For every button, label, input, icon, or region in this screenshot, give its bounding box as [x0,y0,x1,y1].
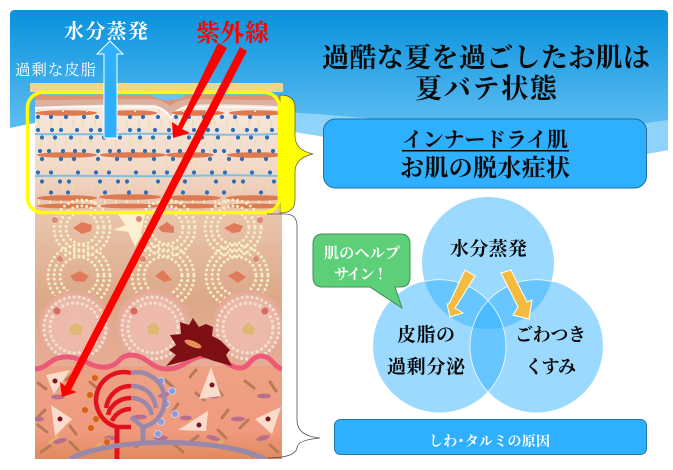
label: sebum: 皮脂の [397,324,455,346]
label: roughness and dullness: ごわつき [515,325,586,345]
skin cross-section illustration [34,95,285,459]
cell nuclei [70,222,246,283]
evaporation label: 水分蒸発 [64,20,148,43]
wrinkle cause box [334,420,646,454]
dermis cell layer [35,200,285,370]
UV long arrow [60,47,247,397]
blue water lines [35,134,279,176]
header background [10,10,668,162]
label: sebum [387,324,467,378]
yellow highlight frame with brace [28,92,313,213]
title: 過酷な夏を過ごしたお肌は [322,43,650,73]
arrow: evaporation to roughness [501,270,532,319]
UV short arrow [172,43,227,138]
melanocyte dark cell [166,318,232,366]
circle: sebum [373,280,506,412]
cell nuclei dots [52,378,270,428]
circle: water evaporation [422,197,554,329]
pink basement membrane [35,355,282,369]
arrow: evaporation to sebum [447,270,475,317]
label: roughness and dullness [515,325,586,377]
orange lens cells [35,110,284,208]
UV label: 紫外線 [196,20,269,47]
collagen fibers [37,370,278,456]
pigment granules [52,216,263,262]
blue water molecule dots [38,117,279,192]
basal cells row [38,289,285,365]
pale triangular cells [46,367,281,436]
green speech bubble [313,234,410,308]
label: evaporation: 水分蒸発 [450,238,527,260]
label: sebum: 過剰分泌 [387,356,467,378]
cell rings [48,200,268,307]
title: 夏バテ状態 [415,73,559,104]
fibroblast cell [112,212,146,247]
evaporation up arrow [97,41,123,138]
upper skin layer: epidermis [35,95,284,213]
label: roughness and dullness: くすみ [525,357,576,377]
tan skin surface bar [30,83,283,92]
blood vessel loop [70,372,265,459]
wrinkle cause box: しわ･タルミの原因 [429,433,550,450]
white overlap outlines [422,280,554,392]
green speech bubble: 肌のヘルプ [324,245,400,262]
excess sebum label: 過剰な皮脂 [15,61,96,79]
inner dry skin box [324,119,646,188]
venn diagram [373,197,603,412]
purple lens cells [34,391,271,445]
lower bracket [267,214,320,458]
pale lipid sticks [38,110,279,202]
inner dry skin box: お肌の脱水症状 [400,155,571,182]
lower dermis [34,366,282,459]
circle: roughness [470,280,603,412]
orange blood cells [82,374,110,446]
green speech bubble: サイン！ [334,266,388,283]
purple blood cells [154,378,178,438]
inner dry skin box: インナードライ肌 [402,128,568,152]
title [322,43,650,104]
